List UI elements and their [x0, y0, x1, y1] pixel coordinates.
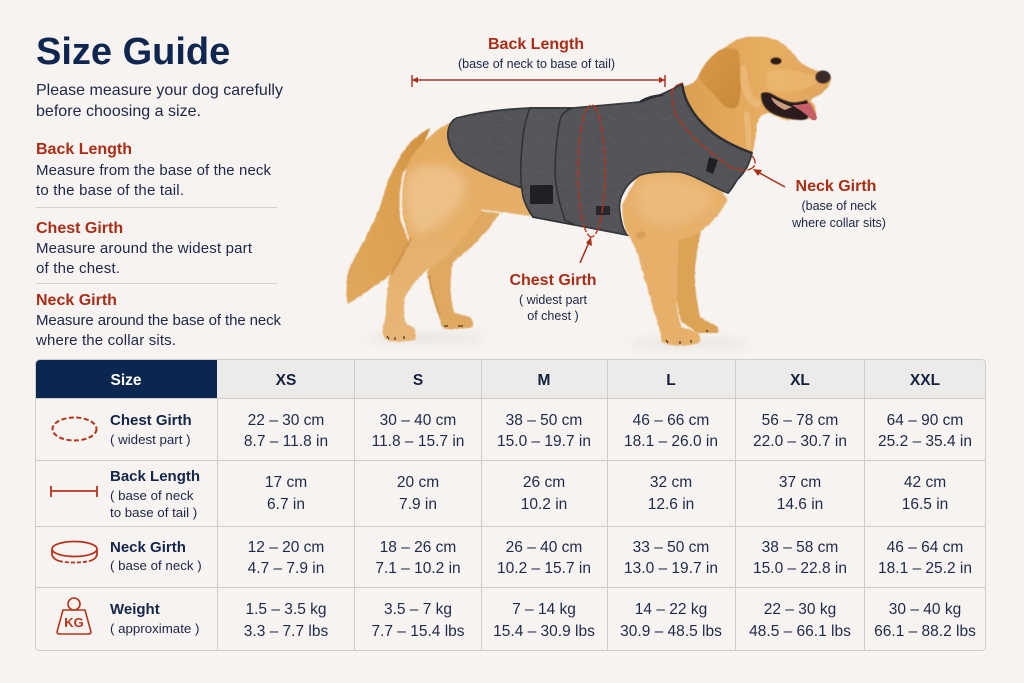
row: neck girth: 38 – 58 cm [762, 539, 838, 556]
row: chest girth: 64 – 90 cm [887, 412, 963, 429]
icon: kg weight [57, 598, 91, 634]
harness strap at top [640, 95, 663, 102]
neck and head [682, 37, 831, 153]
teeth [771, 97, 792, 110]
instruction: neck girth [35, 292, 282, 349]
intro text: Please measure your dog carefully [36, 82, 283, 99]
row: weight: 22 – 30 kg [764, 601, 836, 618]
row: chest girth: Chest Girth [110, 412, 192, 429]
row: back length: 16.5 in [902, 496, 948, 513]
row: neck girth: 10.2 – 15.7 in [497, 560, 591, 577]
table header: XL [790, 372, 810, 389]
back length annotation: Back Length [488, 36, 584, 53]
intro text: before choosing a size. [36, 103, 201, 120]
instruction: back length: Measure from the base of the neck [36, 162, 272, 179]
table header [36, 360, 985, 398]
row: chest girth [52, 412, 972, 450]
instruction: back length: Back Length [36, 141, 132, 158]
row: neck girth: 18 – 26 cm [380, 539, 456, 556]
row: chest girth: 30 – 40 cm [380, 412, 456, 429]
neck girth annotation: Neck Girth [796, 178, 876, 195]
instruction: neck girth: Measure around the base of the neck [36, 312, 282, 329]
row: weight: 66.1 – 88.2 lbs [874, 623, 976, 640]
row: weight: 48.5 – 66.1 lbs [749, 623, 851, 640]
row: back length: Back Length [110, 468, 200, 485]
row: back length: 14.6 in [777, 496, 823, 513]
row: weight: Weight [110, 601, 160, 618]
neck girth annotation: (base of neck [801, 199, 877, 213]
row: weight: 30.9 – 48.5 lbs [620, 623, 722, 640]
row: chest girth: 15.0 – 19.7 in [497, 433, 591, 450]
row: weight: 30 – 40 kg [889, 601, 961, 618]
instruction: neck girth: Neck Girth [36, 292, 117, 309]
dog illustration [346, 37, 831, 346]
row: neck girth: 26 – 40 cm [506, 539, 582, 556]
row: weight: 15.4 – 30.9 lbs [493, 623, 595, 640]
icon: measure line [51, 486, 97, 497]
row: neck girth: 7.1 – 10.2 in [375, 560, 461, 577]
row: back length: 12.6 in [648, 496, 694, 513]
row: neck girth: 46 – 64 cm [887, 539, 963, 556]
instruction: chest girth: Chest Girth [36, 220, 123, 237]
row: back length: 32 cm [650, 474, 692, 491]
row: neck girth: 4.7 – 7.9 in [248, 560, 324, 577]
row: chest girth: 22 – 30 cm [248, 412, 324, 429]
back length annotation [412, 36, 665, 87]
tail [346, 128, 430, 304]
row: neck girth: 33 – 50 cm [633, 539, 709, 556]
icon: collar ring [52, 542, 97, 562]
row: back length: 7.9 in [399, 496, 437, 513]
chest girth annotation: Chest Girth [509, 272, 597, 289]
table header: L [666, 372, 676, 389]
chest girth annotation: ( widest part [519, 293, 588, 307]
row: neck girth: ( base of neck ) [110, 558, 202, 573]
back length annotation: (base of neck to base of tail) [458, 57, 615, 71]
table header: Size [110, 372, 142, 389]
icon: dashed ellipse [52, 418, 96, 440]
row: back length: 17 cm [265, 474, 307, 491]
row: weight: 7 – 14 kg [512, 601, 576, 618]
row: neck girth: 13.0 – 19.7 in [624, 560, 718, 577]
row: neck girth: 18.1 – 25.2 in [878, 560, 972, 577]
instruction: back length [36, 141, 272, 199]
far hind leg [427, 210, 500, 329]
size table [36, 360, 986, 650]
icon: kg weight: KG [64, 615, 84, 630]
row: neck girth: 12 – 20 cm [248, 539, 324, 556]
near front leg and chest [622, 170, 727, 346]
row: back length: to base of tail ) [110, 505, 197, 520]
row: back length [51, 468, 948, 520]
neck girth annotation: where collar sits) [791, 216, 886, 230]
row: back length: 42 cm [904, 474, 946, 491]
row: chest girth: 18.1 – 26.0 in [624, 433, 718, 450]
row: weight: 1.5 – 3.5 kg [245, 601, 327, 618]
chest girth annotation [509, 105, 605, 323]
row: chest girth: ( widest part ) [110, 432, 191, 447]
table header: M [538, 372, 550, 389]
row: weight: ( approximate ) [110, 621, 199, 636]
tongue [792, 103, 817, 120]
row: back length: 20 cm [397, 474, 439, 491]
row: back length: 26 cm [523, 474, 565, 491]
row: chest girth: 46 – 66 cm [633, 412, 709, 429]
row: weight: 3.5 – 7 kg [384, 601, 452, 618]
table header: XXL [910, 372, 940, 389]
instruction: back length: to the base of the tail. [36, 182, 184, 199]
row: chest girth: 8.7 – 11.8 in [244, 433, 328, 450]
jacket [448, 84, 752, 235]
row: chest girth: 25.2 – 35.4 in [878, 433, 972, 450]
row: weight: 7.7 – 15.4 lbs [371, 623, 465, 640]
intro text [36, 82, 283, 120]
row: chest girth: 38 – 50 cm [506, 412, 582, 429]
instruction: chest girth [36, 220, 253, 277]
mouth [761, 92, 809, 120]
ear [698, 48, 741, 108]
row: weight [57, 598, 976, 640]
table header: S [413, 372, 423, 389]
eye [770, 58, 782, 64]
neck girth annotation [672, 83, 886, 230]
row: back length: 6.7 in [267, 496, 305, 513]
far front leg [677, 230, 719, 333]
row: weight: 14 – 22 kg [635, 601, 707, 618]
row: chest girth: 11.8 – 15.7 in [372, 433, 464, 450]
row: back length: ( base of neck [110, 488, 194, 503]
row: back length: 10.2 in [521, 496, 567, 513]
instruction: chest girth: of the chest. [36, 260, 120, 277]
row: chest girth: 56 – 78 cm [762, 412, 838, 429]
row: back length: 37 cm [779, 474, 821, 491]
fur shading [387, 66, 820, 344]
body and hind leg [382, 122, 540, 342]
row: chest girth: 22.0 – 30.7 in [753, 433, 847, 450]
chest girth annotation: of chest ) [527, 309, 579, 323]
row: neck girth [52, 539, 972, 577]
table header: XS [276, 372, 296, 389]
instruction: chest girth: Measure around the widest part [36, 240, 253, 257]
jacket strap [521, 108, 575, 225]
instruction: neck girth: where the collar sits. [35, 332, 176, 349]
velcro patches [530, 185, 553, 204]
row: neck girth: 15.0 – 22.8 in [753, 560, 847, 577]
title: Size Guide [36, 31, 230, 73]
nose [816, 70, 830, 84]
collar edge [682, 84, 752, 153]
row: weight: 3.3 – 7.7 lbs [244, 623, 328, 640]
row: neck girth: Neck Girth [110, 539, 186, 556]
